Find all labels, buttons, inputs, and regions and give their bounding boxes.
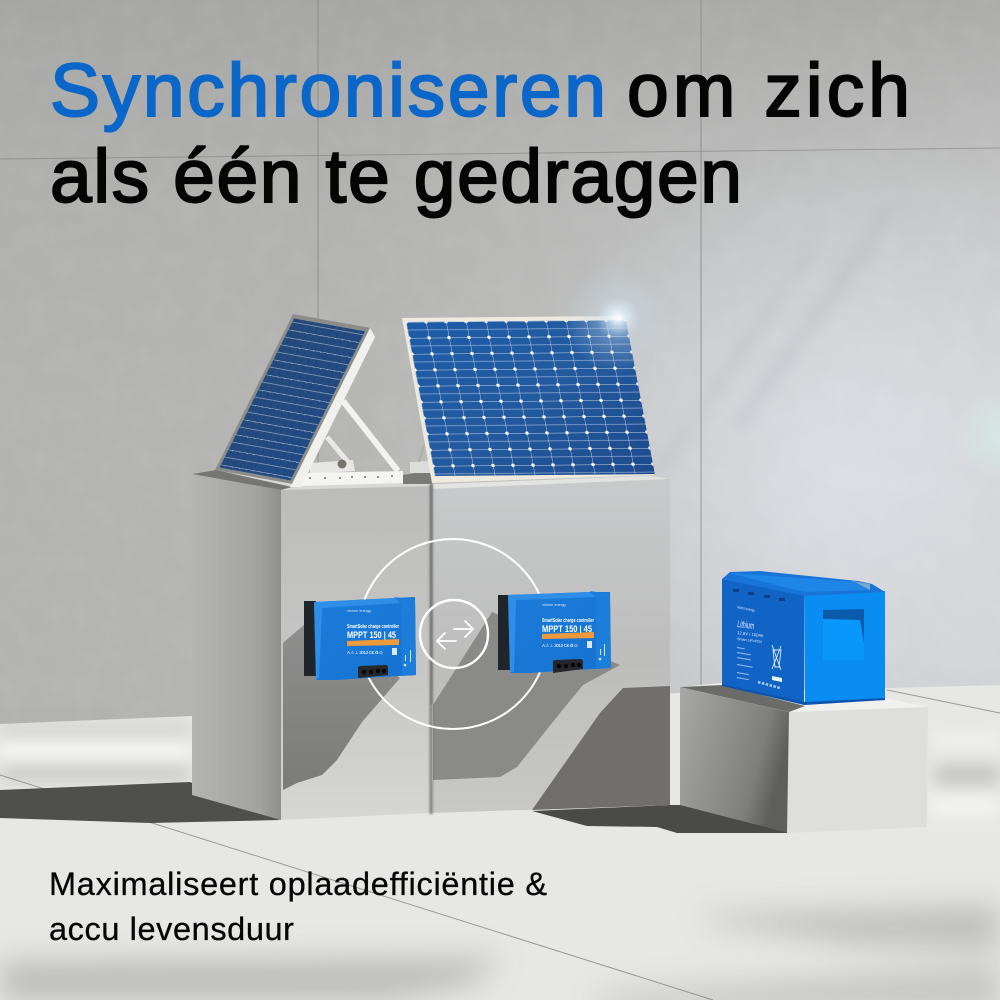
title: om zich	[627, 48, 910, 132]
background: concrete floor	[0, 685, 1000, 1000]
charge controller: left: victron energy	[347, 609, 371, 613]
title	[50, 48, 910, 218]
rear bracket	[403, 445, 432, 484]
charge controller: right: SmartSolar charge controller	[542, 618, 595, 624]
battery: lithium: victron energy	[737, 605, 755, 613]
cast shadow corner on right pedestal	[532, 686, 670, 810]
charge controller: left	[304, 597, 416, 680]
charge controller: left: MPPT 150 | 45	[347, 630, 397, 641]
battery: lithium: Smart LiFePO4	[737, 637, 762, 644]
subtitle text: accu levensduur	[49, 911, 294, 947]
charge controller: right: A ⚠ ⊥ 2012 C€ ♻ ⊙	[542, 643, 578, 648]
subtitle text	[49, 866, 547, 947]
block: right pedestal	[430, 476, 670, 814]
background: concrete wall	[0, 0, 1000, 730]
charge controller: right	[498, 591, 611, 673]
charge controller: left: A ⚠ ⊥ 2012 C€ ♻ ⊙	[347, 650, 383, 655]
sync icon: inner circle with arrows	[420, 600, 488, 668]
floor shadow: right	[532, 805, 790, 833]
battery label: Lithium	[737, 619, 755, 632]
arrow left	[437, 633, 456, 649]
title: als één te gedragen	[50, 134, 742, 218]
shadow on left pedestal	[283, 617, 400, 790]
solar panel: left tilted with stand	[215, 314, 403, 487]
floor shadow: left	[0, 782, 280, 823]
battery: lithium: 12,8V / 100Ah	[737, 630, 764, 638]
block: left pedestal	[192, 470, 430, 820]
battery: lithium	[722, 571, 885, 705]
stand struts and base	[300, 401, 403, 486]
charge controller: right: MPPT 150 | 45	[542, 624, 593, 635]
shadow band on right pedestal	[433, 612, 620, 780]
battery handle recess	[823, 609, 864, 660]
sync ring: large circle	[358, 539, 548, 729]
subtitle text: Maximaliseert oplaadefficiëntie &	[49, 866, 547, 902]
charge controller: right: victron energy	[542, 603, 566, 607]
title: Synchroniseren	[50, 48, 606, 132]
charge controller: left: SmartSolar charge controller	[347, 624, 400, 630]
lens flare on panel corner	[563, 263, 673, 373]
arrow right	[454, 621, 473, 637]
white side rail	[290, 328, 375, 487]
solar panel: right	[402, 316, 655, 484]
block: small pedestal	[680, 683, 928, 833]
